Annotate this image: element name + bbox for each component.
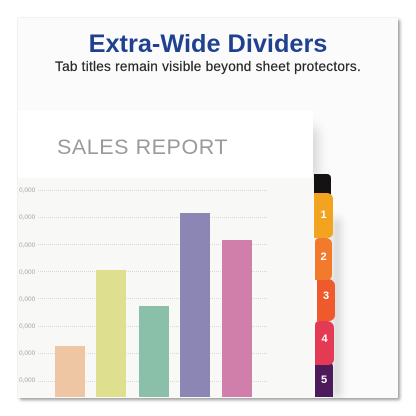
bar 5 [222,240,252,397]
tab 2: 2 [320,251,327,263]
y-axis labels: 0,000 [19,242,35,249]
y-axis labels: 0,000 [19,323,35,330]
tab shadow [332,218,341,398]
bar 2 [96,270,126,397]
black tab [314,174,331,198]
bar 3 [139,306,169,397]
report sheet [18,111,313,178]
tab 2 [315,238,332,280]
report heading: SALES REPORT [57,135,228,159]
report sheet shadow [306,128,316,178]
subtitle: Tab titles remain visible beyond sheet protectors. [55,59,361,74]
y-axis labels: 0,000 [19,269,35,276]
tab 5: 5 [321,374,327,386]
tab 5 [315,361,333,397]
chart [18,178,313,397]
y-axis labels: 0,000 [19,214,35,221]
y-axis labels: 0,000 [19,187,35,194]
tab 3: 3 [323,290,329,302]
bar 1 [55,346,85,397]
y-axis labels: 0,000 [19,350,35,357]
y-axis labels: 0,000 [19,377,35,384]
tabs [314,174,335,397]
title: Extra-Wide Dividers [89,30,327,58]
y-axis gridlines [38,190,267,191]
y-axis labels: 0,000 [19,296,35,303]
tab 1 [314,193,333,238]
y-axis labels [19,187,35,384]
tab 4: 4 [321,333,328,345]
tab 3 [317,279,335,321]
tab 4 [315,321,334,365]
tab 1: 1 [320,208,327,220]
bar 4 [180,213,210,397]
